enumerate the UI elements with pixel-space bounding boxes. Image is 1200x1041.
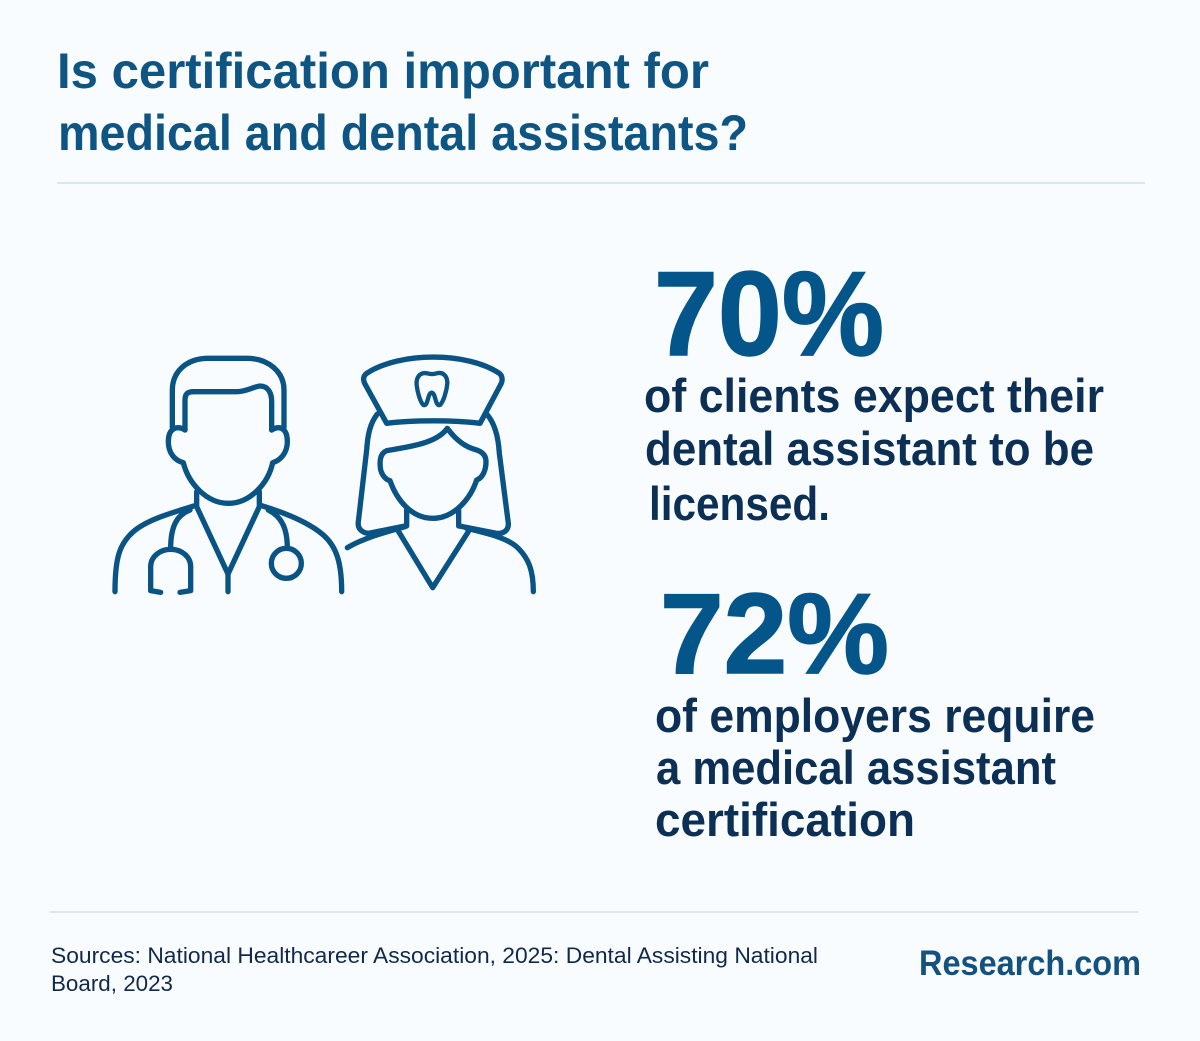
text: 70% description: of clients expect their xyxy=(644,369,1104,422)
sources xyxy=(51,943,818,996)
icon: doctor xyxy=(115,358,342,592)
sources: Board, 2023 xyxy=(51,971,173,996)
stat: 70%: 70% xyxy=(654,247,884,381)
icon: dental nurse xyxy=(347,357,533,592)
stat: 72%: 72% xyxy=(660,571,889,698)
title: medical and dental assistants? xyxy=(58,105,748,161)
title xyxy=(57,43,748,161)
text: 70% description: dental assistant to be xyxy=(645,422,1094,475)
title: Is certification important for xyxy=(57,43,709,99)
text: 72% description: a medical assistant xyxy=(656,741,1056,794)
sources: Sources: National Healthcareer Association, 2025: Dental Assisting National xyxy=(51,943,818,968)
text: 72% description: of employers require xyxy=(655,689,1095,742)
text: 70% description: licensed. xyxy=(649,477,830,530)
icon: doctor and dental nurse xyxy=(115,357,533,592)
text: 72% description: certification xyxy=(655,793,915,846)
text: 70% description xyxy=(644,369,1104,530)
logo: Research.com: Research.com xyxy=(919,944,1141,983)
text: 72% description xyxy=(655,689,1095,846)
